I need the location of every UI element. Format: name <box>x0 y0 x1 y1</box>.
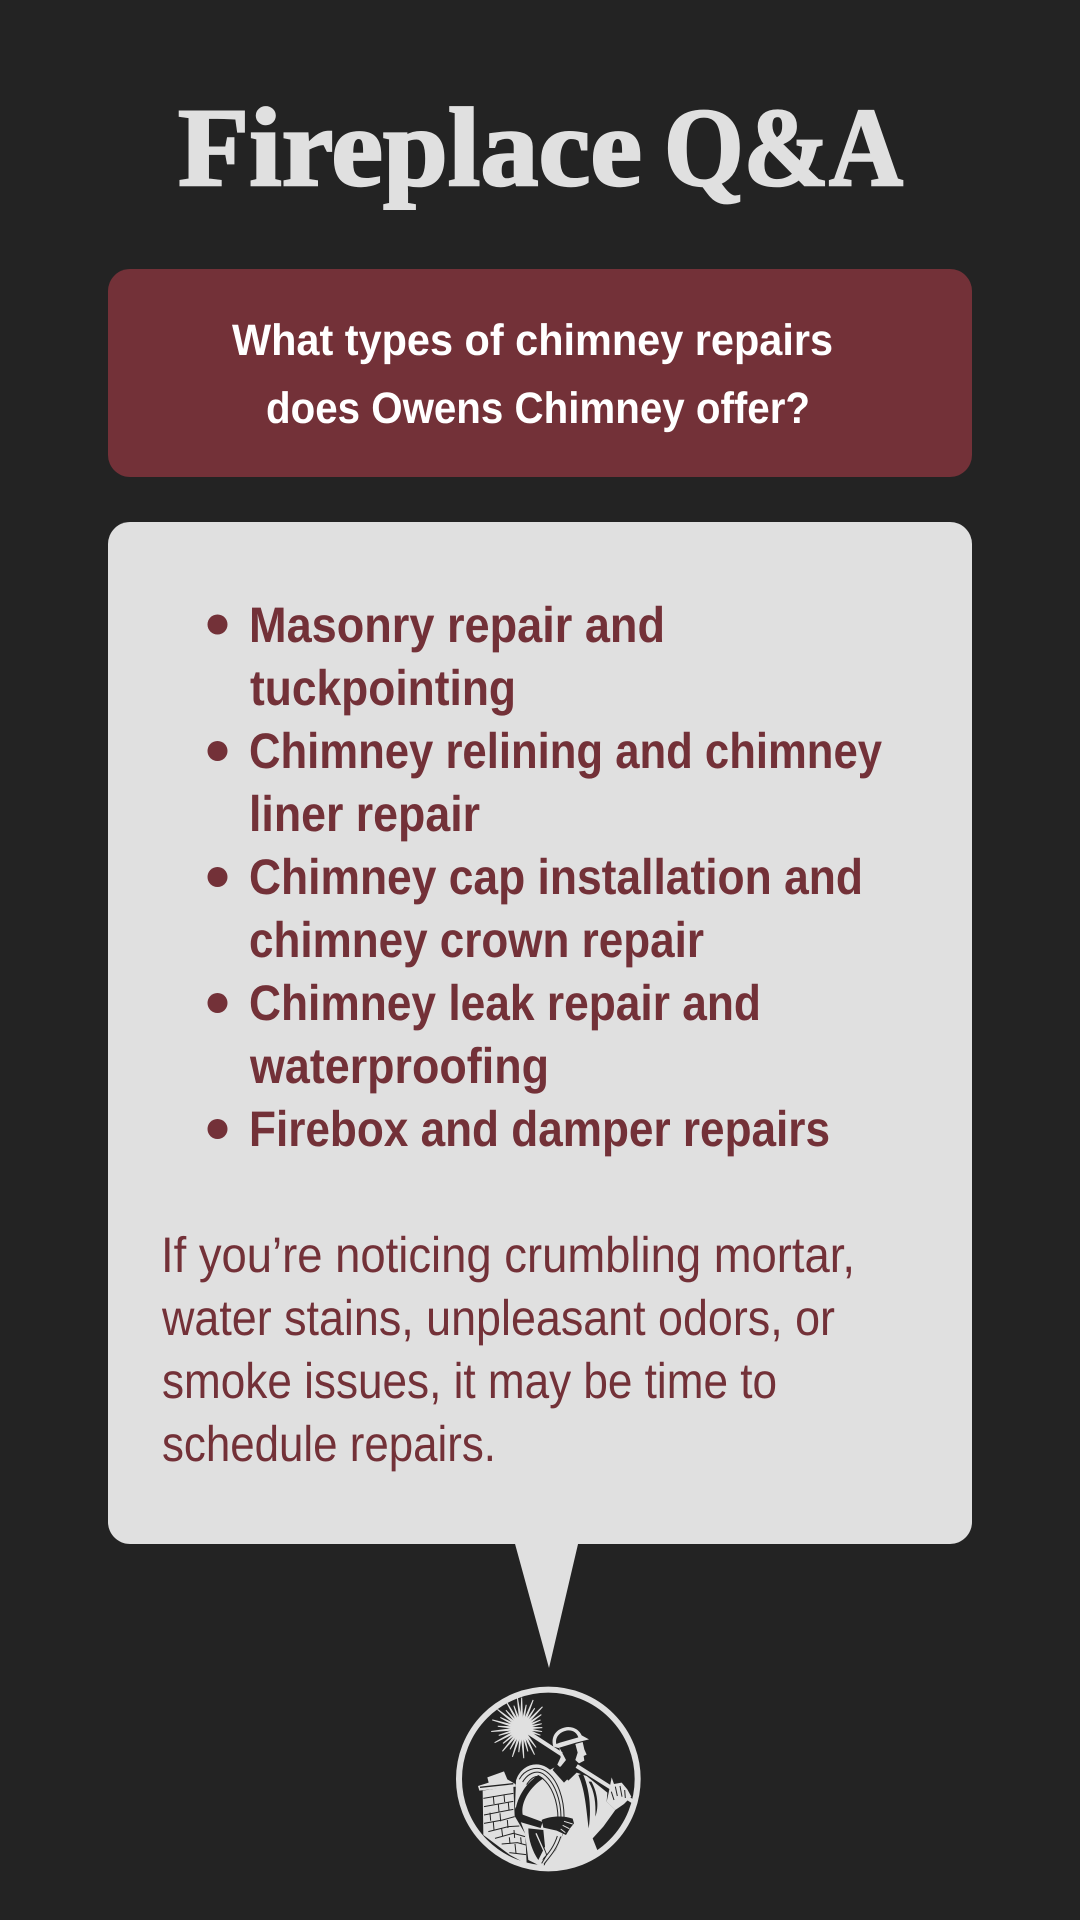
rope below arm <box>528 1828 545 1860</box>
question heading <box>232 316 833 433</box>
panel: question <box>108 269 972 477</box>
list item: cap and crown <box>208 849 863 968</box>
brick lines <box>483 1793 526 1855</box>
closing paragraph: water stains, unpleasant odors, or <box>161 1290 835 1346</box>
chimney cap <box>478 1771 516 1791</box>
dark arm outline <box>515 1775 543 1828</box>
list item: masonry: Masonry repair and <box>249 597 665 653</box>
question heading: does Owens Chimney offer? <box>266 384 810 433</box>
title: Q&A <box>664 86 903 210</box>
title: Fireplace <box>178 86 642 210</box>
title <box>178 86 903 210</box>
chimney body <box>483 1786 527 1864</box>
list of repair types <box>208 597 882 1157</box>
closing paragraph: schedule repairs. <box>162 1416 496 1472</box>
list item: leak repair: waterproofing <box>249 1038 549 1094</box>
question heading: What types of chimney repairs <box>232 316 833 365</box>
list item: leak repair <box>208 975 761 1094</box>
glove <box>542 1817 574 1835</box>
rope separators <box>519 1768 564 1820</box>
list item: relining: liner repair <box>249 786 480 842</box>
icon: chimney sweep logo <box>459 1690 638 1873</box>
list item: relining <box>208 723 882 842</box>
infographic canvas <box>108 106 972 1872</box>
list item: relining: Chimney relining and chimney <box>249 723 882 779</box>
rod <box>523 1729 633 1801</box>
list item: leak repair: Chimney leak repair and <box>249 975 761 1031</box>
closing paragraph: smoke issues, it may be time to <box>162 1353 777 1409</box>
closing paragraph: If you’re noticing crumbling mortar, <box>161 1227 855 1283</box>
collar <box>552 1764 568 1782</box>
raised hand <box>607 1777 631 1810</box>
rope coils <box>515 1764 567 1867</box>
panel: answer speech bubble <box>108 522 972 1668</box>
closing paragraph <box>161 1227 855 1472</box>
cap and face <box>553 1727 589 1748</box>
list item: masonry: tuckpointing <box>250 660 516 716</box>
list item: firebox: Firebox and damper repairs <box>249 1101 830 1157</box>
clothing seam <box>578 1773 590 1828</box>
list item: cap and crown: chimney crown repair <box>249 912 704 968</box>
list item: cap and crown: Chimney cap installation and <box>249 849 863 905</box>
brush <box>491 1698 544 1758</box>
list item: masonry <box>208 597 665 716</box>
torso and arms <box>545 1768 616 1866</box>
